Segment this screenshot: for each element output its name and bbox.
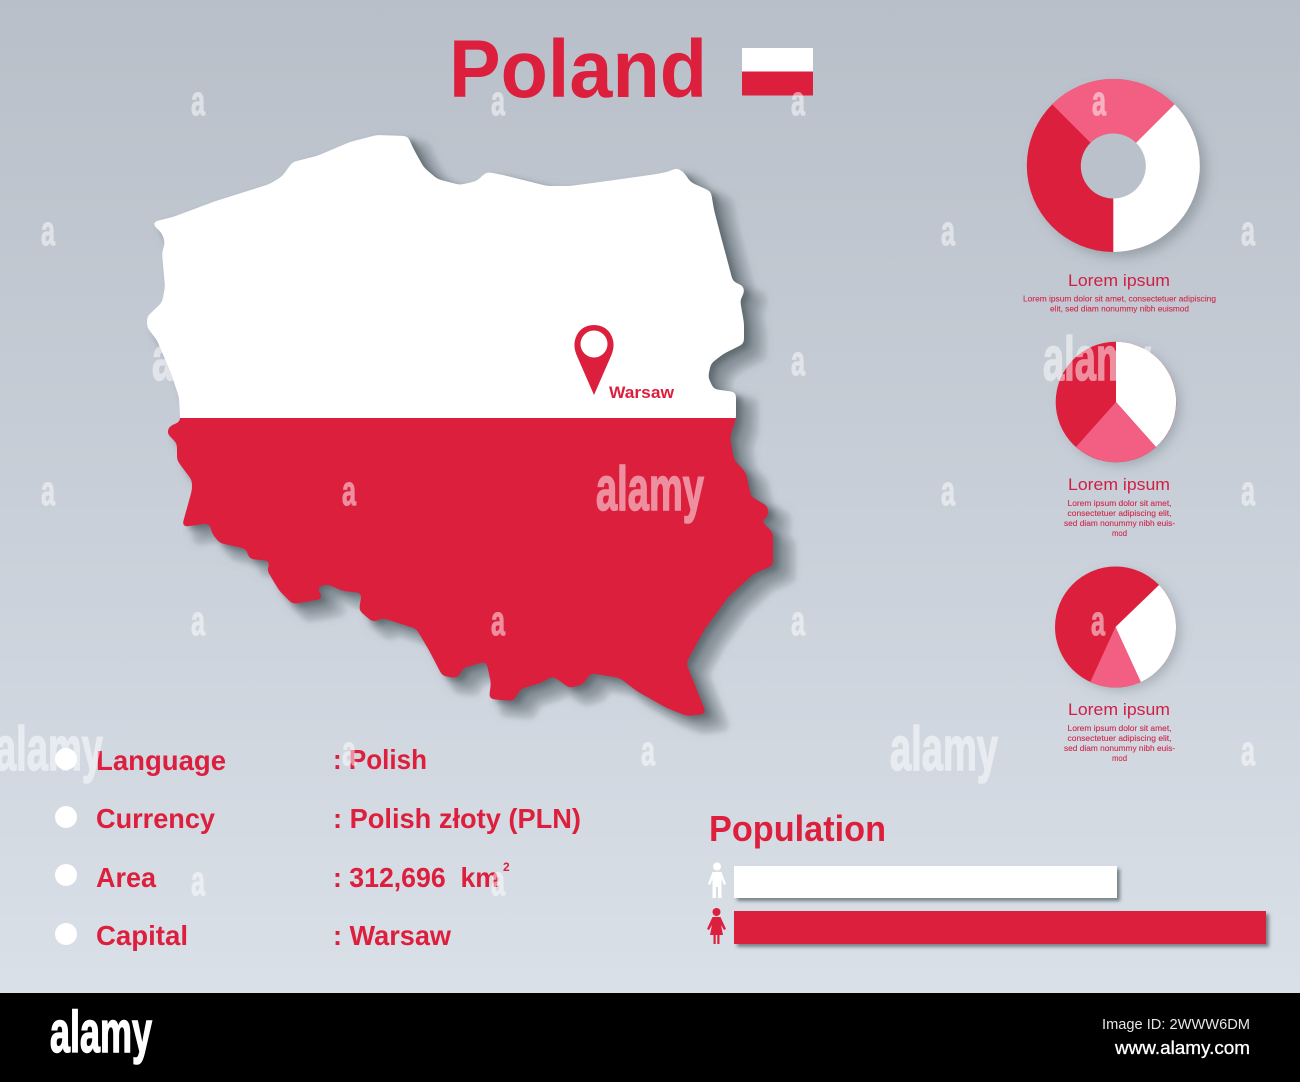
stock watermarks: a	[342, 727, 356, 774]
fact: area: Area	[96, 862, 156, 893]
caption: donut chart: elit, sed diam nonummy nibh euismod	[1050, 304, 1189, 314]
pie chart 2	[1056, 342, 1180, 465]
map of Poland with flag colours	[148, 136, 789, 727]
pie chart 3	[1055, 566, 1180, 690]
fact: currency	[55, 803, 581, 834]
caption: pie chart 3	[1064, 701, 1175, 763]
title: Poland	[449, 24, 707, 115]
facts list	[55, 744, 581, 951]
stock watermarks: a	[491, 597, 505, 644]
stock watermarks: a	[1092, 77, 1106, 124]
icon: map pin	[574, 325, 614, 395]
stock watermarks: a	[1241, 207, 1255, 254]
stock watermarks: a	[791, 77, 805, 124]
caption: donut chart: Lorem ipsum dolor sit amet, consectetuer adipiscing	[1023, 294, 1216, 304]
caption: pie chart 3: consectetuer adipiscing elit,	[1068, 733, 1172, 743]
fact: capital: Capital	[96, 920, 188, 951]
stock watermarks: a	[791, 597, 805, 644]
stock watermarks: a	[191, 597, 205, 644]
stock watermarks: a	[1091, 597, 1105, 644]
caption: donut chart: Lorem ipsum	[1068, 272, 1170, 290]
caption: pie chart 3: sed diam nonummy nibh euis-	[1064, 743, 1175, 753]
stock watermarks	[0, 77, 1255, 904]
stock watermarks: a	[41, 207, 55, 254]
stock watermarks: a	[1241, 727, 1255, 774]
fact: area: 2	[503, 860, 510, 874]
stock watermarks: a	[641, 727, 655, 774]
stock watermarks: alamy	[1043, 325, 1151, 394]
stock watermarks: a	[491, 857, 505, 904]
caption: pie chart 2: mod	[1112, 528, 1127, 538]
fact: area	[55, 860, 510, 893]
icon: male figure	[708, 862, 726, 898]
caption: pie chart 2: Lorem ipsum dolor sit amet,	[1068, 498, 1172, 508]
icon: female figure	[707, 908, 726, 944]
fact: language: : Polish	[333, 744, 427, 775]
fact: capital: : Warsaw	[333, 920, 451, 951]
caption: donut chart	[1023, 272, 1216, 314]
bar: female population	[734, 911, 1269, 947]
caption: pie chart 3: Lorem ipsum	[1068, 701, 1170, 719]
stock watermarks: a	[41, 467, 55, 514]
fact: language: Language	[96, 745, 226, 776]
footer band: www.alamy.com	[1114, 1038, 1250, 1058]
stock watermarks: a	[342, 467, 356, 514]
fact: area: : 312,696 km	[333, 862, 499, 893]
stock watermarks: a	[191, 857, 205, 904]
stock watermarks: a	[1241, 467, 1255, 514]
caption: pie chart 3: mod	[1112, 753, 1127, 763]
fact: language	[55, 744, 427, 776]
icon: flag of Poland	[742, 48, 813, 96]
caption: pie chart 2: sed diam nonummy nibh euis-	[1064, 518, 1175, 528]
footer band	[0, 993, 1300, 1082]
fact: currency: : Polish złoty (PLN)	[333, 803, 581, 834]
stock watermarks: a	[491, 77, 505, 124]
stock watermarks: alamy	[0, 715, 103, 784]
population heading: Population	[709, 808, 886, 849]
stock watermarks: a	[941, 207, 955, 254]
footer band: Image ID: 2WWW6DM	[1102, 1016, 1250, 1033]
stock watermarks: alamy	[890, 715, 998, 784]
bar: male population	[734, 866, 1120, 901]
capital label on map: Warsaw	[609, 383, 675, 402]
fact: capital	[55, 920, 451, 951]
stock watermarks: a	[191, 77, 205, 124]
footer band: alamy	[50, 1000, 152, 1065]
stock watermarks: alamy	[152, 325, 260, 394]
caption: pie chart 3: Lorem ipsum dolor sit amet,	[1068, 723, 1172, 733]
stock watermarks: a	[791, 337, 805, 384]
caption: pie chart 2: Lorem ipsum	[1068, 476, 1170, 494]
stock watermarks: alamy	[596, 455, 704, 524]
caption: pie chart 2	[1064, 476, 1175, 538]
caption: pie chart 2: consectetuer adipiscing elit,	[1068, 508, 1172, 518]
fact: currency: Currency	[96, 803, 215, 834]
donut chart	[1027, 79, 1206, 257]
stock watermarks: a	[941, 467, 955, 514]
